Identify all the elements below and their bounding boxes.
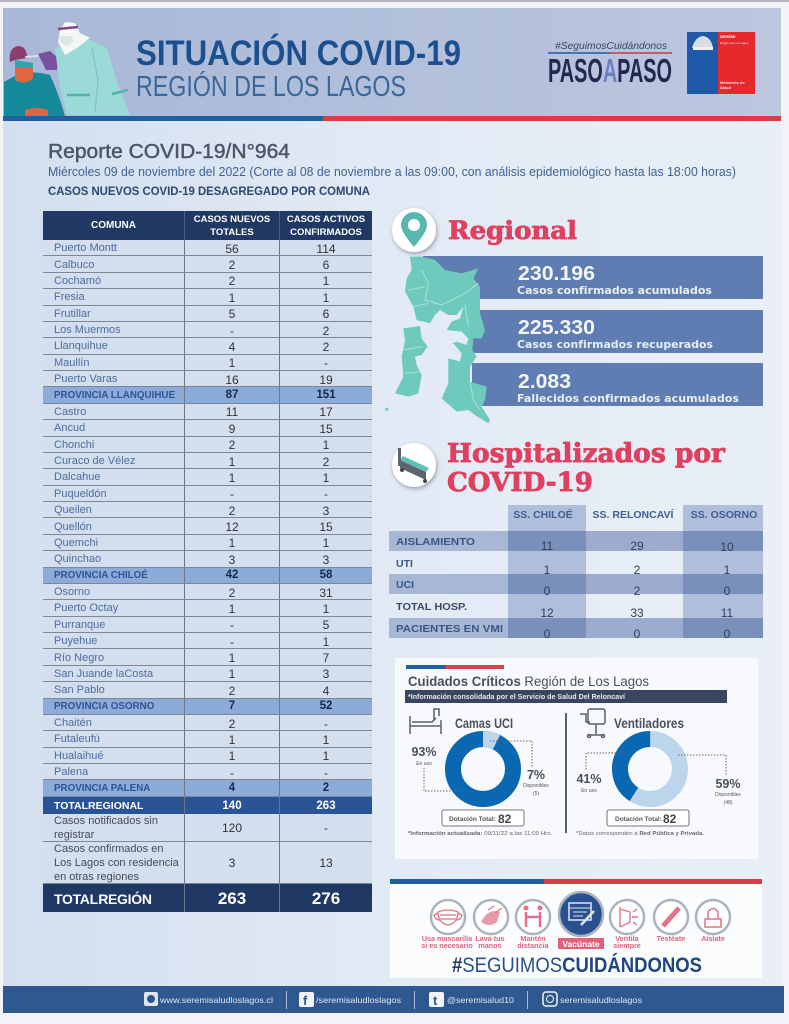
panel: regional xyxy=(385,208,763,423)
table: casos por comuna: 6 xyxy=(323,258,329,272)
table: casos por comuna: 17 xyxy=(319,405,333,419)
table: casos por comuna: Chaitén xyxy=(54,717,92,729)
icon labels: Vacúnate xyxy=(562,939,600,949)
table: casos por comuna: Río Negro xyxy=(54,652,104,664)
table: casos por comuna: Osorno xyxy=(54,586,90,598)
hospitalization table: SS. RELONCAVÍ xyxy=(593,508,675,521)
table: casos por comuna: Cochamó xyxy=(54,275,101,287)
table: casos por comuna: 2 xyxy=(323,782,329,794)
panel: seguimos cuidándonos xyxy=(390,879,762,978)
icon: lavado de manos xyxy=(474,900,508,934)
hospitalization table: SS. CHILOÉ xyxy=(513,508,573,521)
icon: vacúnate xyxy=(559,892,603,936)
table: casos por comuna: 1 xyxy=(229,536,235,550)
table: casos por comuna: 4 xyxy=(229,340,235,354)
icon labels: Ventila xyxy=(615,934,640,943)
icon: location pin xyxy=(392,208,436,252)
stat: casos acumulados: 230.196 xyxy=(518,263,595,285)
paso a paso logo: PASOAPASO xyxy=(548,52,672,89)
icon: bed uci xyxy=(410,709,441,734)
heading: cuidados críticos: Cuidados Críticos Región de Los Lagos xyxy=(408,673,649,689)
table: casos por comuna: 1 xyxy=(229,733,235,747)
icon labels: Testéate xyxy=(657,934,685,943)
table: casos por comuna: TOTALREGIONAL xyxy=(54,800,143,812)
icon labels: manos xyxy=(478,941,502,950)
table: casos por comuna: 7 xyxy=(323,651,329,665)
callouts: camas uci xyxy=(411,741,549,797)
table: casos por comuna: 1 xyxy=(323,635,329,649)
table: casos por comuna: Puerto Varas xyxy=(54,373,117,385)
table: casos por comuna: CASOS ACTIVOS xyxy=(287,214,365,224)
info bar: *Información consolidada por el Servicio de Salud Del Reloncaví xyxy=(408,694,626,701)
hospitalization table: SS. OSORNO xyxy=(691,509,757,521)
table: casos por comuna: 11 xyxy=(226,405,238,419)
table: casos por comuna xyxy=(43,211,372,912)
table: casos por comuna: 15 xyxy=(319,422,333,436)
table: casos por comuna: 2 xyxy=(323,340,329,354)
map: región de los lagos xyxy=(385,257,490,423)
box: dotación ventiladores xyxy=(607,810,689,826)
hashtag: seguimos cuidándonos: #SEGUIMOSCUIDÁNDONOS xyxy=(452,954,702,977)
table: casos por comuna: 52 xyxy=(320,700,332,712)
stat: casos recuperados xyxy=(472,310,763,353)
logo: seremi de salud: Región de Los Lagos xyxy=(720,41,749,45)
table: casos por comuna: San Pablo xyxy=(54,684,105,696)
hospitalization table: AISLAMIENTO xyxy=(396,536,475,548)
table: casos por comuna: PROVINCIA OSORNO xyxy=(54,701,154,712)
box: dotación camas xyxy=(442,810,524,826)
stat: casos acumulados xyxy=(423,256,763,299)
table: casos por comuna: Puyehue xyxy=(54,635,97,647)
hospitalization table xyxy=(389,505,763,641)
table: casos por comuna: 1 xyxy=(229,455,235,469)
table: casos por comuna: 1 xyxy=(323,536,329,550)
table: casos por comuna: CASOS NUEVOS xyxy=(194,214,270,224)
table heading: CASOS NUEVOS COVID-19 DESAGREGADO POR COMUNA xyxy=(48,186,370,198)
table: casos por comuna: 56 xyxy=(225,242,239,256)
table: casos por comuna: CONFIRMADOS xyxy=(290,226,362,238)
footnote: ventiladores: *Datos corresponden a Red Pública y Privada. xyxy=(576,831,705,837)
hospitalization table: 0 xyxy=(544,584,551,598)
callouts: ventiladores xyxy=(576,753,741,806)
table: casos por comuna: PROVINCIA LLANQUIHUE xyxy=(54,390,175,401)
icon: facebook: f xyxy=(303,993,308,1008)
footer facebook: /seremisaludloslagos xyxy=(316,995,401,1005)
heading: regional: Regional xyxy=(448,216,577,245)
table: casos por comuna: Quemchi xyxy=(54,537,98,549)
hospitalization table: TOTAL HOSP. xyxy=(396,601,467,613)
stat: fallecidos: 2.083 xyxy=(518,371,571,393)
footnote: camas: *Información actualizada: 09/11/22 a las 11:00 Hrs. xyxy=(408,831,553,837)
icon: ventila xyxy=(610,900,644,934)
heading: camas uci: Camas UCI xyxy=(455,716,513,731)
callouts: ventiladores: 59% xyxy=(715,777,741,791)
table: casos por comuna: - xyxy=(324,821,328,835)
stat: casos recuperados: Casos confirmados recuperados xyxy=(517,338,713,351)
table: casos por comuna: 2 xyxy=(323,324,329,338)
table: casos por comuna: - xyxy=(324,717,328,731)
table: casos por comuna: 1 xyxy=(323,471,329,485)
icon: instagram xyxy=(543,992,557,1006)
table: casos por comuna: 16 xyxy=(225,373,239,387)
table: casos por comuna: 58 xyxy=(320,569,332,581)
hospitalization table: 1 xyxy=(724,563,731,577)
panel: cuidados críticos xyxy=(395,658,758,859)
icon: aíslate xyxy=(696,900,730,934)
table: casos por comuna: 87 xyxy=(226,389,238,401)
table: casos por comuna: San Juande laCosta xyxy=(54,668,153,680)
header banner xyxy=(3,8,781,116)
icon: twitter xyxy=(429,992,444,1008)
table: casos por comuna: Dalcahue xyxy=(54,471,100,483)
table: casos por comuna: 3 xyxy=(323,667,329,681)
table: casos por comuna: 5 xyxy=(229,307,235,321)
donut chart: ventiladores xyxy=(609,728,691,810)
stat: fallecidos xyxy=(472,363,763,406)
table: casos por comuna: 1 xyxy=(323,749,329,763)
hospitalization table: 11 xyxy=(541,539,554,553)
callouts: camas uci: Disponibles xyxy=(523,783,549,789)
table: casos por comuna: - xyxy=(230,487,234,501)
table: casos por comuna: Frutillar xyxy=(54,308,91,320)
heading: ventiladores: Ventiladores xyxy=(614,716,684,731)
table: casos por comuna: Casos confirmados en Los Lagos con residencia en otras regiones xyxy=(54,843,179,883)
subtitle: REGIÓN DE LOS LAGOS xyxy=(136,70,406,103)
table: casos por comuna: Llanquihue xyxy=(54,340,108,352)
hospitalization table: 0 xyxy=(634,627,641,641)
icon: web xyxy=(144,992,158,1006)
hospitalization table: 33 xyxy=(630,606,644,620)
callouts: ventiladores: Disponibles xyxy=(715,792,741,798)
table: casos por comuna: 12 xyxy=(225,520,239,534)
footer twitter: @seremisalud10 xyxy=(447,995,514,1005)
hospitalization table: 2 xyxy=(634,563,641,577)
hospitalization table: PACIENTES EN VMI xyxy=(396,623,503,635)
table: casos por comuna: TOTAL REGIÓN xyxy=(54,891,152,907)
table: casos por comuna: PROVINCIA CHILOÉ xyxy=(54,570,148,581)
stat: casos recuperados: 225.330 xyxy=(518,317,595,339)
icon: distancia xyxy=(516,900,550,934)
table: casos por comuna: 1 xyxy=(229,602,235,616)
logo: seremi de salud: Salud xyxy=(720,85,731,90)
table: casos por comuna: 263 xyxy=(316,800,336,812)
icon labels: si es necesario xyxy=(421,941,473,950)
callouts: ventiladores: En uso xyxy=(581,788,597,794)
icon labels: Mantén xyxy=(520,934,546,943)
table: casos por comuna: Castro xyxy=(54,406,86,418)
icon: twitter: t xyxy=(433,993,438,1008)
hospitalization table: UCI xyxy=(396,579,414,591)
hospitalization table: UTI xyxy=(396,558,413,570)
footer instagram: seremisaludloslagos xyxy=(560,995,642,1005)
table: casos por comuna: 1 xyxy=(229,356,235,370)
table: casos por comuna: 263 xyxy=(218,889,246,908)
table: casos por comuna: Purranque xyxy=(54,619,105,631)
table: casos por comuna: 1 xyxy=(323,602,329,616)
logo: seremi de salud: SEREMI xyxy=(720,34,735,39)
table: casos por comuna: 3 xyxy=(323,553,329,567)
table: casos por comuna: Ancud xyxy=(54,422,85,434)
table: casos por comuna: COMUNA xyxy=(91,220,136,231)
hashtag: #SeguimosCuidándonos xyxy=(555,40,668,52)
callouts: ventiladores: 41% xyxy=(576,772,602,786)
table: casos por comuna: - xyxy=(324,487,328,501)
icon labels: Lava tus xyxy=(475,934,505,943)
table: casos por comuna: 2 xyxy=(229,274,235,288)
table: casos por comuna: Maullín xyxy=(54,357,89,369)
icon labels: Usa mascarilla xyxy=(422,934,473,943)
table: casos por comuna: 4 xyxy=(323,684,329,698)
table: casos por comuna: Hualaihué xyxy=(54,750,104,762)
table: casos por comuna: 1 xyxy=(323,274,329,288)
table: casos por comuna: 1 xyxy=(229,291,235,305)
logo: seremi de salud: Ministerio de xyxy=(720,80,745,85)
box: dotación ventiladores: Dotación Total: xyxy=(615,816,662,823)
stat: fallecidos: Fallecidos confirmados acumulados xyxy=(517,392,739,405)
table: casos por comuna: 1 xyxy=(323,733,329,747)
info bar xyxy=(405,690,727,703)
table: casos por comuna: 140 xyxy=(222,800,242,812)
header stripe xyxy=(3,116,781,121)
table: casos por comuna: - xyxy=(230,324,234,338)
table: casos por comuna: 4 xyxy=(229,782,235,794)
icon labels: siempre xyxy=(613,941,641,950)
table: casos por comuna: - xyxy=(230,766,234,780)
table: casos por comuna: 31 xyxy=(319,586,333,600)
table: casos por comuna: Chonchi xyxy=(54,439,94,451)
table: casos por comuna: 2 xyxy=(229,717,235,731)
table: casos por comuna: Puerto Montt xyxy=(54,242,117,254)
illustration: health workers xyxy=(4,22,130,116)
table: casos por comuna: 3 xyxy=(229,856,235,870)
hospitalization table: 0 xyxy=(724,627,731,641)
table: casos por comuna: 3 xyxy=(229,553,235,567)
table: casos por comuna: - xyxy=(324,766,328,780)
table: casos por comuna: 120 xyxy=(222,821,242,835)
hospitalization table: 12 xyxy=(540,606,554,620)
callouts: camas uci: (5) xyxy=(533,791,539,797)
table: casos por comuna: 13 xyxy=(319,856,333,870)
table: casos por comuna: 1 xyxy=(229,667,235,681)
heading: hospitalizados por covid-19 xyxy=(447,439,725,498)
icon: hospital bed xyxy=(392,443,436,487)
icon labels xyxy=(421,934,725,950)
table: casos por comuna: Puerto Octay xyxy=(54,602,118,614)
callouts: camas uci: En uso xyxy=(416,761,432,767)
table: casos por comuna: - xyxy=(230,635,234,649)
table: casos por comuna: 9 xyxy=(229,422,235,436)
table: casos por comuna: 114 xyxy=(316,242,336,256)
table: casos por comuna: Fresia xyxy=(54,291,85,303)
box: dotación camas: Dotación Total: xyxy=(449,816,496,823)
icon: mascarilla xyxy=(431,900,465,934)
hospitalization table: 10 xyxy=(720,540,734,554)
icon labels: Aíslate xyxy=(701,934,725,943)
heading: hospitalizados por covid-19: COVID-19 xyxy=(447,468,593,498)
table: casos por comuna: Quellón xyxy=(54,521,92,533)
table: casos por comuna: 151 xyxy=(316,389,336,401)
table: casos por comuna: 1 xyxy=(229,471,235,485)
table: casos por comuna: 2 xyxy=(323,455,329,469)
logo: seremi de salud xyxy=(687,32,755,94)
footer bar xyxy=(3,986,784,1013)
table: casos por comuna: 276 xyxy=(312,889,340,908)
report heading: Reporte COVID-19/N°964 xyxy=(48,141,290,163)
stat: casos acumulados: Casos confirmados acumulados xyxy=(517,284,712,297)
table: casos por comuna: Puqueldón xyxy=(54,488,107,500)
table: casos por comuna: 1 xyxy=(323,291,329,305)
donut chart: camas uci xyxy=(453,739,513,799)
icon: facebook xyxy=(299,992,314,1008)
callouts: ventiladores: (48) xyxy=(724,800,733,806)
callouts: camas uci: 7% xyxy=(527,768,545,782)
hospitalization table: 29 xyxy=(630,539,644,553)
table: casos por comuna: 15 xyxy=(319,520,333,534)
table: casos por comuna: 7 xyxy=(229,700,235,712)
box: dotación ventiladores: 82 xyxy=(663,812,677,826)
callouts: camas uci: 93% xyxy=(411,745,437,759)
table: casos por comuna: Curaco de Vélez xyxy=(54,455,135,467)
hospitalization table: 2 xyxy=(634,584,641,598)
title: SITUACIÓN COVID-19 xyxy=(136,33,461,73)
footer website: www.seremisaludloslagos.cl xyxy=(159,995,273,1005)
table: casos por comuna: 2 xyxy=(229,684,235,698)
panel: hospitalizados xyxy=(389,439,763,641)
table: casos por comuna: 1 xyxy=(229,749,235,763)
table: casos por comuna: PROVINCIA PALENA xyxy=(54,783,150,794)
icon: ventilator xyxy=(580,709,605,738)
hospitalization table: 11 xyxy=(721,606,734,620)
table: casos por comuna: TOTALES xyxy=(210,226,254,238)
table: casos por comuna: 2 xyxy=(229,258,235,272)
table: casos por comuna: 1 xyxy=(323,438,329,452)
table: casos por comuna: Calbuco xyxy=(54,259,94,271)
table: casos por comuna: 3 xyxy=(323,504,329,518)
box: dotación camas: 82 xyxy=(498,812,512,826)
icon labels: distancia xyxy=(517,941,550,950)
table: casos por comuna: 2 xyxy=(229,438,235,452)
table: casos por comuna: 5 xyxy=(323,618,329,632)
table: casos por comuna: 6 xyxy=(323,307,329,321)
table: casos por comuna: Futaleufú xyxy=(54,733,100,745)
table: casos por comuna: Casos notificados sin registrar xyxy=(54,815,158,841)
hospitalization table: 0 xyxy=(724,584,731,598)
table: casos por comuna: Palena xyxy=(54,766,88,778)
table: casos por comuna: Quinchao xyxy=(54,553,101,565)
table: casos por comuna: Queilen xyxy=(54,504,92,516)
report date text: Miércoles 09 de noviembre del 2022 (Corte al 08 de noviembre a las 09:00, con análisis epidemiológico hasta las 18:00 horas) xyxy=(48,165,736,179)
heading: hospitalizados por covid-19: Hospitalizados por xyxy=(447,439,725,469)
table: casos por comuna: 42 xyxy=(226,569,238,581)
table: casos por comuna: 2 xyxy=(229,586,235,600)
table: casos por comuna: 2 xyxy=(229,504,235,518)
icon: testéate xyxy=(654,900,688,934)
hospitalization table: 1 xyxy=(544,563,551,577)
table: casos por comuna: Los Muermos xyxy=(54,324,121,336)
table: casos por comuna: 1 xyxy=(229,651,235,665)
table: casos por comuna: 19 xyxy=(319,373,333,387)
table: casos por comuna: - xyxy=(230,618,234,632)
table: casos por comuna: - xyxy=(324,356,328,370)
hospitalization table: 0 xyxy=(544,627,551,641)
